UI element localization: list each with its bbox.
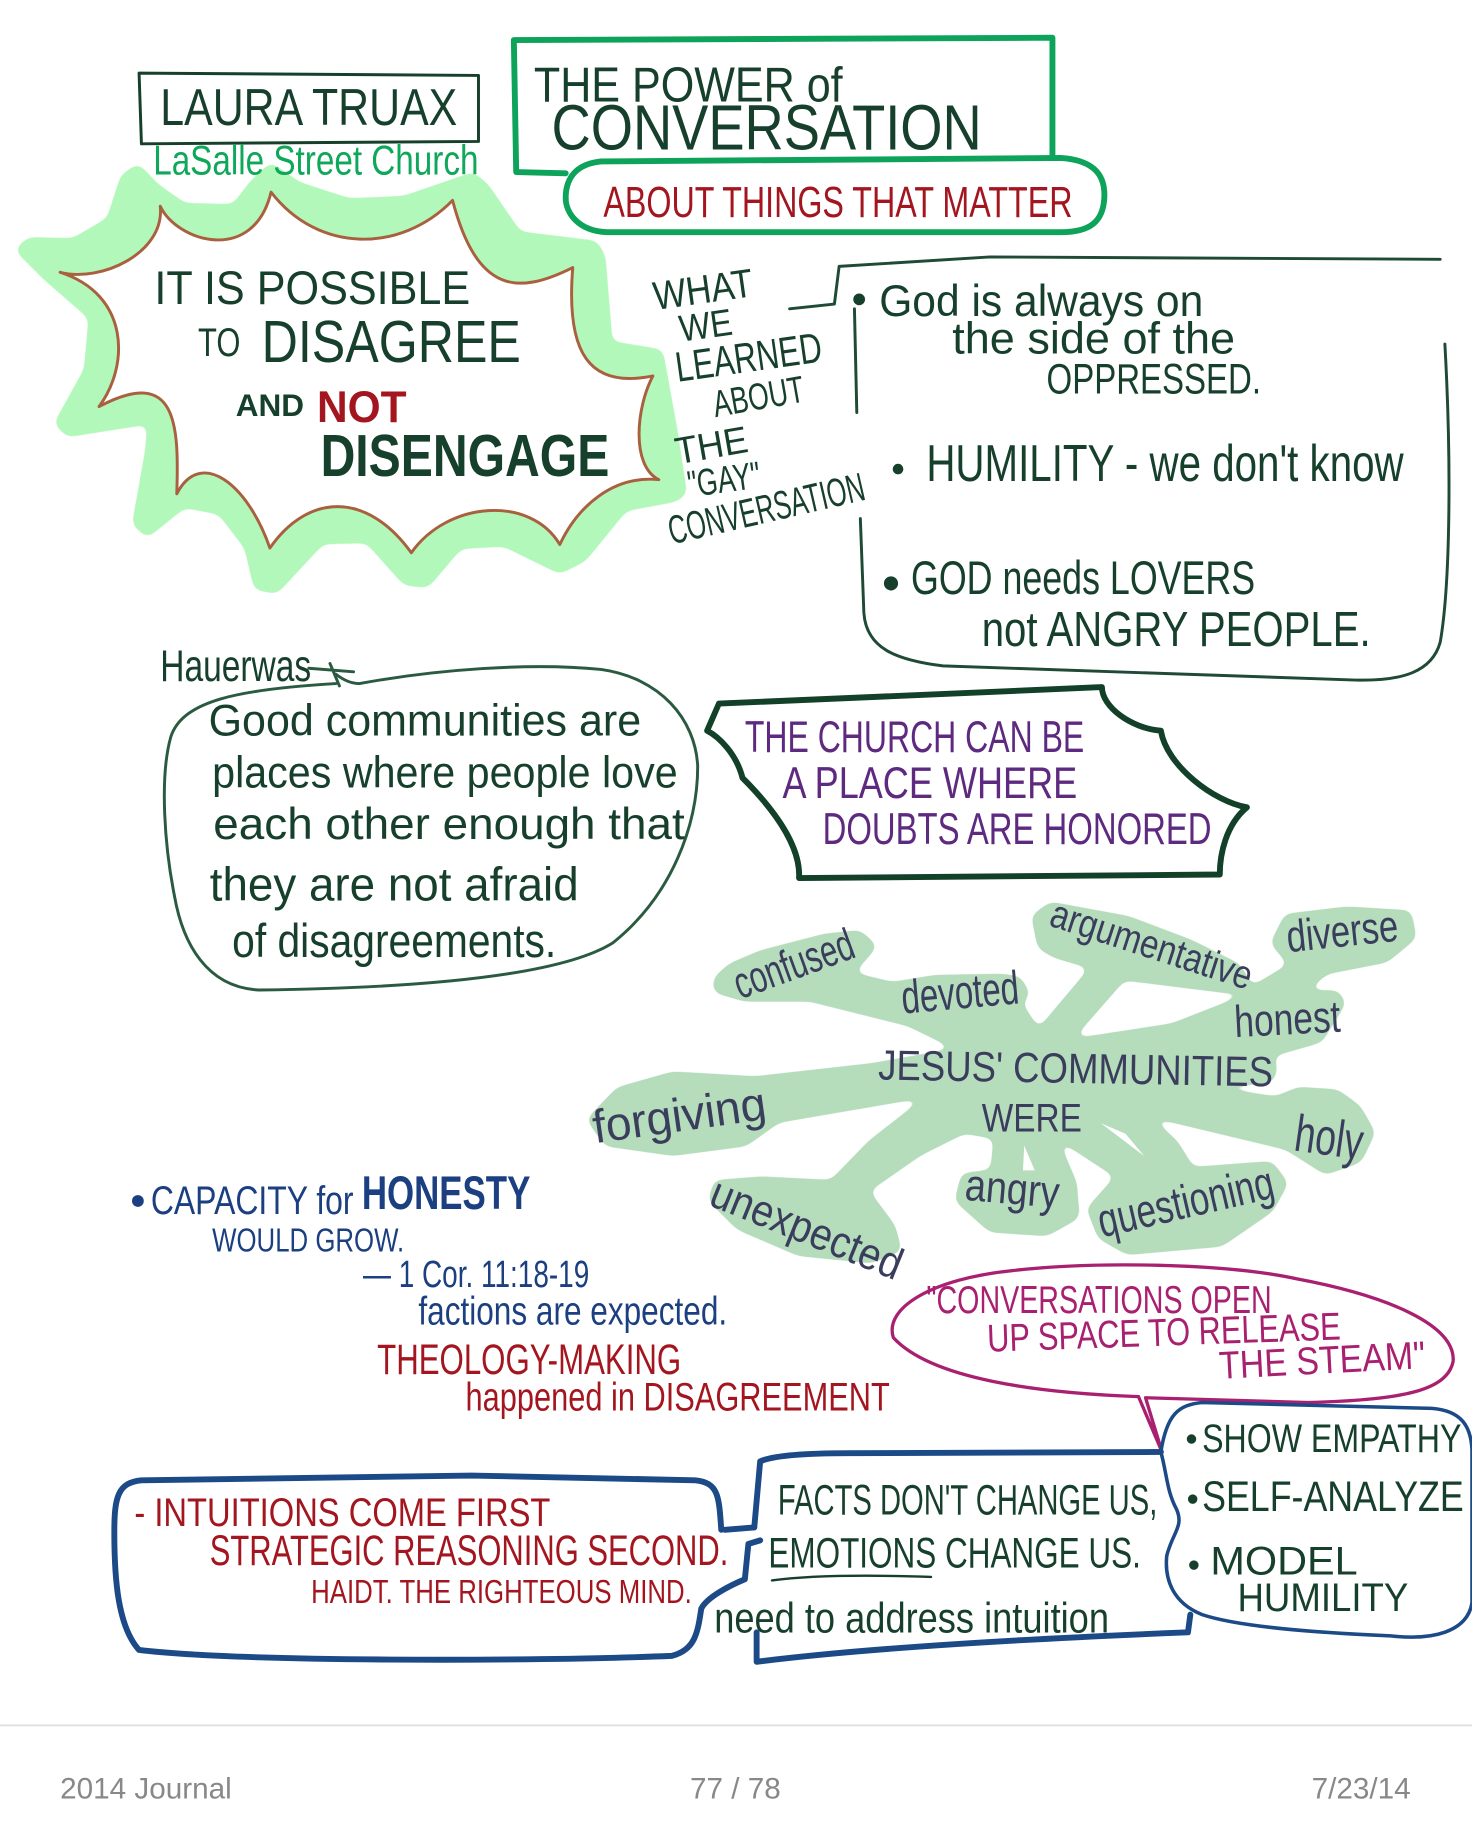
learned point 1: God is always on xyxy=(879,276,1203,326)
panel: facts and emotions: need to address intuition xyxy=(714,1594,1109,1641)
panel: facts and emotions xyxy=(714,1452,1190,1662)
note: theology-making: happened in DISAGREEMENT xyxy=(466,1376,890,1420)
mind map words: WERE xyxy=(982,1096,1082,1140)
speech bubble: conversations open up space: UP SPACE TO RELEASE xyxy=(986,1305,1341,1361)
note: theology-making xyxy=(377,1336,890,1420)
green cloud shape xyxy=(590,905,1413,1260)
learned point 1: OPPRESSED. xyxy=(1047,356,1261,403)
burst text: IT IS POSSIBLE xyxy=(154,261,470,314)
speaker name box: LAURA TRUAX xyxy=(160,78,457,136)
speaker name box xyxy=(139,73,478,144)
what we learned label: "GAY" xyxy=(685,454,763,505)
church name: LaSalle Street Church xyxy=(153,137,478,183)
speech bubble: conversations open up space: "CONVERSATIONS OPEN xyxy=(926,1279,1272,1322)
note: theology-making: THEOLOGY-MAKING xyxy=(377,1336,681,1383)
mind map words: honest xyxy=(1233,992,1342,1047)
learned point 3: GOD needs LOVERS xyxy=(911,551,1255,604)
panel: Hauerwas quote: of disagreements. xyxy=(232,914,556,967)
panel: facts and emotions: FACTS DON'T CHANGE US, xyxy=(778,1476,1157,1523)
what we learned label: ABOUT xyxy=(709,368,807,425)
panel: show empathy list: MODEL xyxy=(1210,1540,1358,1584)
panel: intuitions come first: STRATEGIC REASONING SECOND. xyxy=(210,1527,728,1574)
mind map words: angry xyxy=(963,1160,1062,1218)
learned point 3 xyxy=(884,551,1371,657)
panel: facts and emotions: EMOTIONS CHANGE US. xyxy=(768,1529,1141,1576)
what we learned label: WE xyxy=(676,301,735,350)
panel: Hauerwas quote: they are not afraid xyxy=(210,857,579,910)
what we learned label: CONVERSATION xyxy=(664,465,869,553)
learned point 3: not ANGRY PEOPLE. xyxy=(982,602,1371,657)
burst text xyxy=(154,261,609,489)
starburst callout xyxy=(19,166,684,590)
panel: intuitions come first: - INTUITIONS COME FIRST xyxy=(134,1491,550,1535)
burst text: TO xyxy=(198,321,240,365)
note: capacity for honesty xyxy=(132,1166,727,1334)
burst text: AND xyxy=(236,387,304,423)
footer: 2014 Journal xyxy=(60,1772,232,1805)
green highlight band xyxy=(19,166,684,590)
title box: CONVERSATION xyxy=(552,93,982,164)
burst text: DISENGAGE xyxy=(321,424,609,489)
learned point 1: the side of the xyxy=(952,314,1235,364)
speech bubble: conversations open up space: THE STEAM" xyxy=(1218,1334,1426,1388)
subtitle pill xyxy=(566,158,1104,232)
footer: 77 / 78 xyxy=(690,1772,781,1805)
panel: church statement: A PLACE WHERE xyxy=(783,758,1077,808)
panel: church statement: THE CHURCH CAN BE xyxy=(745,712,1084,762)
footer xyxy=(0,1725,1472,1805)
mind map words: forgiving xyxy=(589,1076,769,1153)
note: capacity for honesty: CAPACITY for xyxy=(151,1179,354,1223)
subtitle pill: ABOUT THINGS THAT MATTER xyxy=(603,179,1072,227)
panel: Hauerwas quote: Good communities are xyxy=(209,695,641,745)
note: capacity for honesty: factions are expected. xyxy=(418,1290,727,1334)
panel: show empathy list: HUMILITY xyxy=(1237,1576,1408,1620)
note: capacity for honesty: — 1 Cor. 11:18-19 xyxy=(363,1253,589,1295)
panel: church statement: DOUBTS ARE HONORED xyxy=(823,804,1212,854)
learned point 1 xyxy=(879,276,1261,403)
title box: THE POWER of xyxy=(534,57,843,112)
panel: show empathy list xyxy=(1161,1402,1472,1637)
bullet points xyxy=(853,293,865,305)
what we learned label xyxy=(650,261,869,553)
burst text: DISAGREE xyxy=(262,310,521,375)
burst outline xyxy=(60,192,659,553)
note: capacity for honesty: HONESTY xyxy=(362,1166,530,1219)
panel: what we learned xyxy=(790,257,1449,680)
panel: Hauerwas quote xyxy=(160,641,698,990)
panel: Hauerwas quote: places where people love xyxy=(212,747,678,797)
panel: intuitions come first xyxy=(114,1476,760,1660)
footer: 7/23/14 xyxy=(1312,1772,1411,1805)
mind map words: holy xyxy=(1291,1104,1367,1171)
mind map words xyxy=(589,892,1401,1290)
mind map words: argumentative xyxy=(1045,892,1258,999)
mind map words: unexpected xyxy=(703,1167,910,1290)
mind map words: JESUS' COMMUNITIES xyxy=(878,1042,1273,1095)
note: capacity for honesty: WOULD GROW. xyxy=(212,1222,404,1259)
what we learned label: LEARNED xyxy=(672,324,825,391)
mind map words: confused xyxy=(726,919,861,1009)
mind map: Jesus' communities xyxy=(589,892,1413,1290)
mind map words: devoted xyxy=(899,960,1021,1024)
panel: church statement xyxy=(707,687,1247,878)
mind map words: questioning xyxy=(1092,1155,1279,1247)
what we learned label: WHAT xyxy=(650,261,756,319)
panel: intuitions come first: HAIDT. THE RIGHTEOUS MIND. xyxy=(311,1573,692,1610)
burst text: NOT xyxy=(317,382,407,432)
title box xyxy=(514,38,1052,173)
speech bubble: conversations open up space xyxy=(892,1265,1453,1452)
panel: Hauerwas quote: Hauerwas xyxy=(160,641,311,691)
mind map words: diverse xyxy=(1284,901,1401,962)
panel: Hauerwas quote: each other enough that xyxy=(213,799,685,849)
what we learned label: THE xyxy=(672,418,751,472)
